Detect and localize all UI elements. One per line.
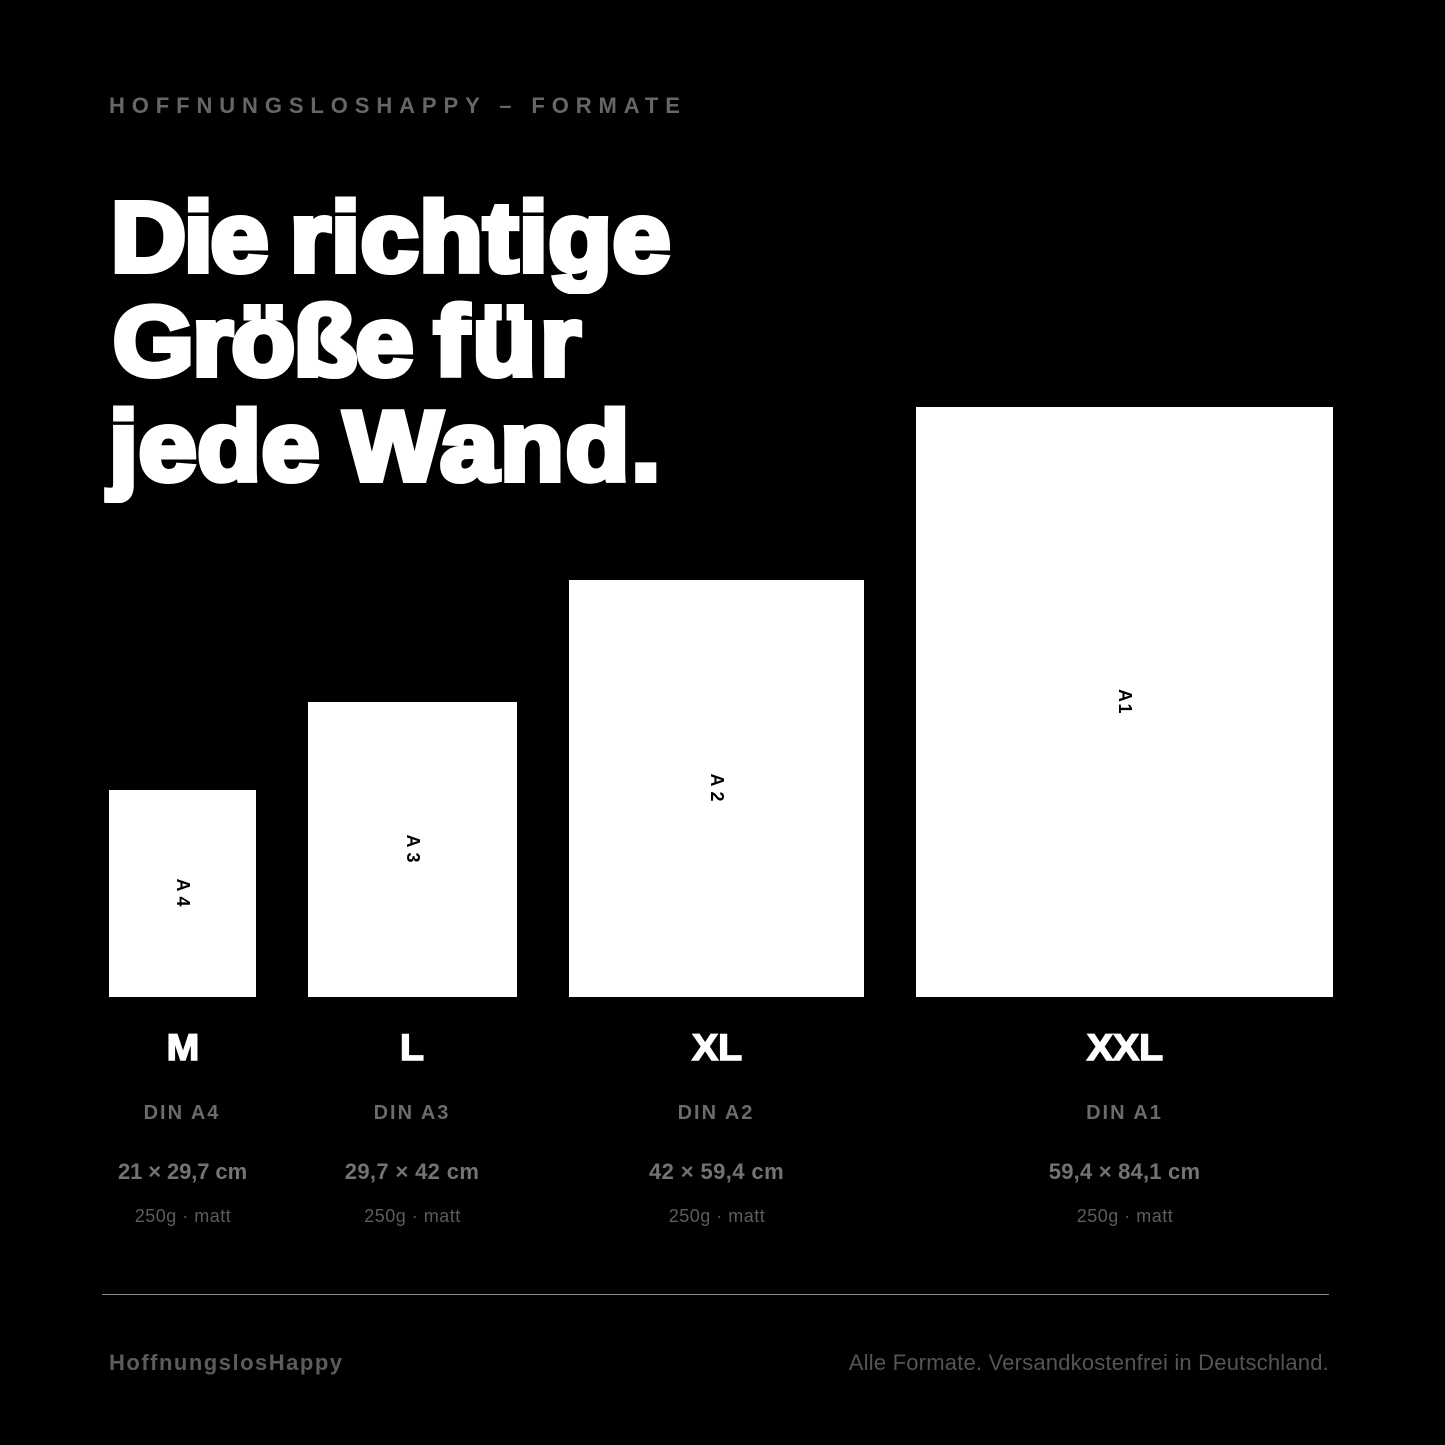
column L: 250g · matt xyxy=(364,1206,461,1226)
title: Größe xyxy=(113,286,412,396)
column XL xyxy=(649,1027,784,1226)
poster A3: A3 xyxy=(403,834,423,867)
footer brand: HoffnungslosHappy xyxy=(109,1350,344,1375)
column XXL: 250g · matt xyxy=(1077,1206,1173,1226)
column L: DIN A3 xyxy=(374,1102,450,1124)
title: jede xyxy=(109,391,320,501)
poster A1 xyxy=(916,407,1333,997)
column XL: XL xyxy=(691,1027,742,1068)
column XXL: 59,4 × 84,1 cm xyxy=(1049,1159,1200,1184)
poster A2 xyxy=(569,580,864,997)
column XL: 250g · matt xyxy=(669,1206,765,1226)
poster A2: A2 xyxy=(707,773,727,806)
poster A4 xyxy=(109,790,256,997)
column M xyxy=(118,1027,247,1226)
title: für xyxy=(434,286,585,396)
poster A4: A4 xyxy=(172,878,192,912)
column M: DIN A4 xyxy=(144,1102,220,1124)
title: Die xyxy=(111,182,266,292)
column M: 21 × 29,7 cm xyxy=(118,1159,247,1184)
column L: 29,7 × 42 cm xyxy=(345,1159,479,1184)
column XXL: DIN A1 xyxy=(1086,1102,1163,1124)
column M: M xyxy=(166,1027,199,1068)
column XL: 42 × 59,4 cm xyxy=(649,1159,784,1184)
poster A1: A1 xyxy=(1114,689,1134,715)
footer note: Alle Formate. Versandkostenfrei in Deutschland. xyxy=(849,1350,1329,1375)
column L: L xyxy=(400,1027,424,1068)
column XXL: XXL xyxy=(1087,1027,1163,1068)
title xyxy=(104,182,671,503)
poster A3 xyxy=(308,702,517,997)
column M: 250g · matt xyxy=(135,1206,231,1226)
eyebrow label: HOFFNUNGSLOSHAPPY – FORMATE xyxy=(109,93,687,118)
title: richtige xyxy=(290,182,671,292)
column XL: DIN A2 xyxy=(678,1102,754,1124)
title: Wand. xyxy=(344,391,662,501)
column L xyxy=(345,1027,479,1226)
column XXL xyxy=(1049,1027,1200,1226)
